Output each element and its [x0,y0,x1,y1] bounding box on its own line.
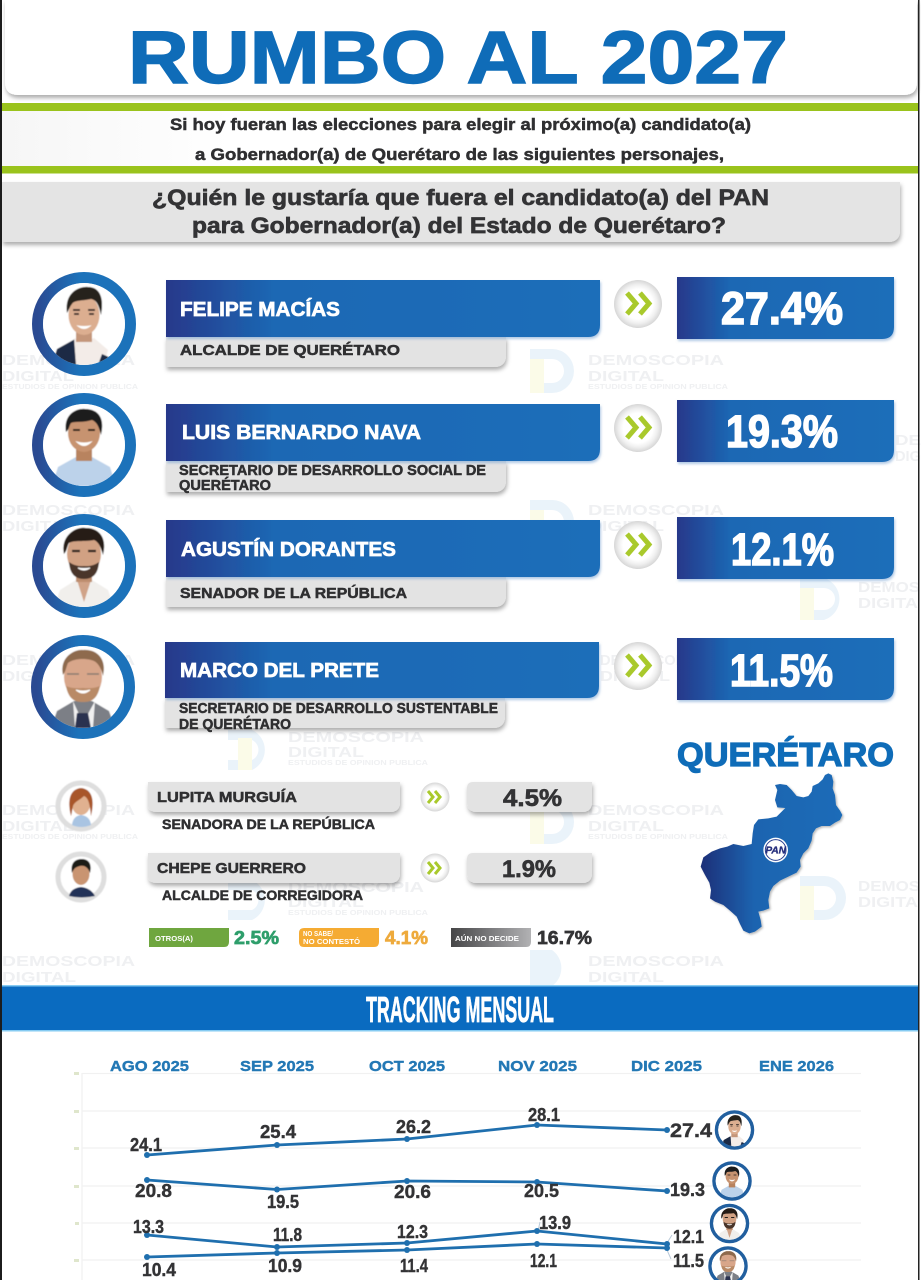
subtitle background wash [2,110,918,168]
legend: aún no decide: AÚN NO DECIDE [455,934,519,943]
legend: aún no decide [451,928,592,948]
candidate row: Agustín Dorantes [38,517,894,612]
watermarks [2,0,921,986]
arrow button [420,782,450,812]
data labels: 20.6 [394,1182,431,1202]
month headers [110,1058,834,1075]
role text: SENADORA DE LA REPÚBLICA [162,815,375,832]
watermarks: DEMOSCOPIA [2,352,135,369]
green divider top [2,103,918,111]
watermarks: DEMOSCOPIA [2,802,135,819]
watermarks: DIGITAL [588,969,664,986]
question panel [2,182,900,242]
arrow button [420,854,450,882]
watermarks: ESTUDIOS DE OPINION PUBLICA [288,760,428,767]
percentage box: 19.3% [726,406,838,457]
percentage box [677,277,894,339]
candidate row: Chepe Guerrero [58,853,592,903]
role bar: ALCALDE DE QUERÉTARO [180,342,400,359]
watermarks: ESTUDIOS DE OPINION PUBLICA [288,910,428,917]
percentage box [677,638,894,700]
data labels: 19.5 [267,1192,299,1212]
data labels: 13.9 [539,1213,571,1233]
data labels: 11.8 [273,1225,302,1245]
role bar: SENADOR DE LA REPÚBLICA [180,584,407,602]
name bar: MARCO DEL PRETE [180,660,379,682]
data labels: 26.2 [396,1117,431,1137]
watermarks: DIGITAL [288,744,364,761]
data labels [130,1105,712,1280]
watermarks: DIGITA [858,595,918,612]
data labels: 12.1 [530,1251,557,1271]
watermarks: DIGITAL [588,368,664,385]
month headers: DIC 2025 [631,1058,702,1075]
legend: otros: OTROS(A) [155,934,193,943]
legend: no sabe: NO CONTESTÓ [303,937,361,946]
percentage box: 1.9% [502,856,556,883]
intro text [170,115,751,164]
watermarks: DIGITAL [2,518,74,535]
percentage box: 4.5% [503,785,562,812]
data labels: 10.9 [268,1256,302,1276]
watermarks: DEMOSCOPIA [588,953,724,970]
role text: ALCALDE DE CORREGIDORA [162,887,363,903]
tracking band [2,985,918,1032]
name bar: CHEPE GUERRERO [157,860,306,877]
name bar [148,782,400,812]
legend: otros [149,928,279,948]
data labels: 12.1 [673,1227,704,1247]
name bar [165,642,599,698]
watermarks: DIGITAL [600,668,670,685]
watermarks: ESTUDIOS DE OPINION PUBLICA [588,834,728,841]
Querétaro label: QUERÉTARO [677,736,894,773]
role bar [166,461,506,494]
title panel [5,0,917,99]
data labels: 12.3 [397,1222,428,1242]
green divider bottom [2,166,918,174]
thumbnail: Marco del Prete [710,1248,746,1280]
arrow button [614,404,662,452]
watermarks: DIGITAL [588,818,664,835]
legend: otros: 2.5% [234,928,279,948]
data labels: 28.1 [528,1105,560,1125]
watermarks: DEMOS [858,579,920,596]
candidate row: Marco del Prete [36,638,894,734]
month headers: SEP 2025 [240,1058,314,1075]
candidate row: Felipe Macías [38,277,894,370]
watermarks: DIGITA [858,894,918,911]
month headers: AGO 2025 [110,1058,189,1075]
arrow button [614,642,662,690]
arrow button [614,280,662,328]
tracking chart [74,1058,861,1280]
role bar: DE QUERÉTARO [179,716,291,733]
data labels: 25.4 [260,1122,296,1142]
PAN logo: PAN [765,846,787,857]
PAN logo [763,838,788,862]
watermarks: DEMOSCOPIA [288,879,424,896]
name bar: LUPITA MURGUÍA [157,789,297,806]
watermarks: DEMOSCOPIA [588,502,724,519]
portrait: Agustín Dorantes [38,520,130,612]
name bar: FELIPE MACÍAS [180,298,340,321]
legend: no sabe [299,928,428,948]
role bar: SECRETARIO DE DESARROLLO SOCIAL DE [179,463,486,479]
intro text: Si hoy fueran las elecciones para elegir al próximo(a) candidato(a) [170,115,751,134]
month headers: ENE 2026 [759,1058,834,1075]
watermarks: DEMOSCOPIA [2,652,135,669]
data labels: 20.8 [135,1181,172,1201]
tracking band: TRACKING MENSUAL [366,989,554,1030]
role bar [165,698,505,733]
percentage box [677,400,894,462]
data labels: 19.3 [670,1180,705,1200]
data labels: 24.1 [130,1135,162,1155]
name bar [166,280,600,337]
question text: para Gobernador(a) del Estado de Querétaro? [192,213,726,238]
thumbnail: Luis Bernardo Nava [714,1163,750,1199]
name bar [166,520,600,577]
percentage box: 11.5% [730,645,833,696]
name bar: AGUSTÍN DORANTES [181,538,396,561]
legend: no sabe: NO SABE/ [303,931,333,938]
line: Luis Bernardo Nava [144,1177,670,1194]
watermarks: DEMOSCOPIA [588,802,724,819]
watermarks: DEMOSCOPIA [288,729,424,746]
watermarks: DEMOSCOPIA [588,352,724,369]
watermarks: DIGITAL [2,969,76,986]
data labels: 20.5 [524,1181,559,1201]
watermarks: ESTUDIOS DE OPINION PUBLICA [2,384,138,391]
role bar [166,337,506,367]
watermarks: DE [895,432,921,449]
watermarks: DIGITAL [2,668,74,685]
portrait: Luis Bernardo Nava [38,398,130,492]
percentage box: 27.4% [721,283,843,334]
question text: ¿Quién le gustaría que fuera el candidato(a) del PAN [152,185,769,210]
percentage box: 12.1% [731,524,834,575]
watermarks: ESTUDIOS DE OPINION PUBLICA [588,384,728,391]
watermarks: DIG [895,448,921,465]
legend: no sabe: 4.1% [385,928,428,948]
month headers: NOV 2025 [498,1058,577,1075]
name bar: LUIS BERNARDO NAVA [182,422,421,444]
question text [152,185,769,238]
watermarks: DIGITAL [288,894,364,911]
month headers: OCT 2025 [369,1058,445,1075]
watermarks: DEMOS [858,878,920,895]
line: Felipe Macías [144,1122,670,1158]
watermarks: ESTUDIOS DE OPINION PUBLICA [2,834,138,841]
watermarks: DEMOSCOPIA [600,652,700,669]
watermarks: DEMOSCOPIA [2,502,135,519]
arrow button [614,521,662,569]
watermarks: DIGITAL [2,818,74,835]
watermarks: DEMOSCOPIA [2,953,135,970]
percentage box [677,517,894,579]
role bar: SECRETARIO DE DESARROLLO SUSTENTABLE [179,701,498,717]
thumbnail: Agustín Dorantes [712,1206,748,1242]
line: Agustín Dorantes [144,1228,670,1250]
role bar [166,577,506,607]
portrait: Chepe Guerrero [58,854,104,900]
intro text: a Gobernador(a) de Querétaro de las siguientes personajes, [195,145,724,164]
watermarks: DIGITAL [2,368,74,385]
thumbnail: Felipe Macías [716,1112,752,1148]
data labels: 13.3 [133,1217,164,1237]
data labels: 11.5 [673,1251,704,1271]
portrait: Lupita Murguía [58,783,104,829]
watermarks: DIGITAL [588,518,664,535]
name bar [148,853,400,883]
portrait: Marco del Prete [36,640,130,734]
map of Querétaro [701,773,842,933]
percentage box [467,853,592,883]
data labels: 27.4 [670,1121,712,1142]
candidate row: Luis Bernardo Nava [38,398,894,494]
legend: aún no decide: 16.7% [537,928,592,948]
data labels: 10.4 [142,1260,176,1280]
candidate row: Lupita Murguía [58,782,592,832]
portrait: Felipe Macías [38,278,130,370]
name bar [166,404,600,461]
line: Marco del Prete [144,1241,670,1260]
role bar: QUERÉTARO [179,477,271,494]
percentage box [467,782,592,812]
title: RUMBO AL 2027 [128,16,788,99]
data labels: 11.4 [400,1256,428,1276]
